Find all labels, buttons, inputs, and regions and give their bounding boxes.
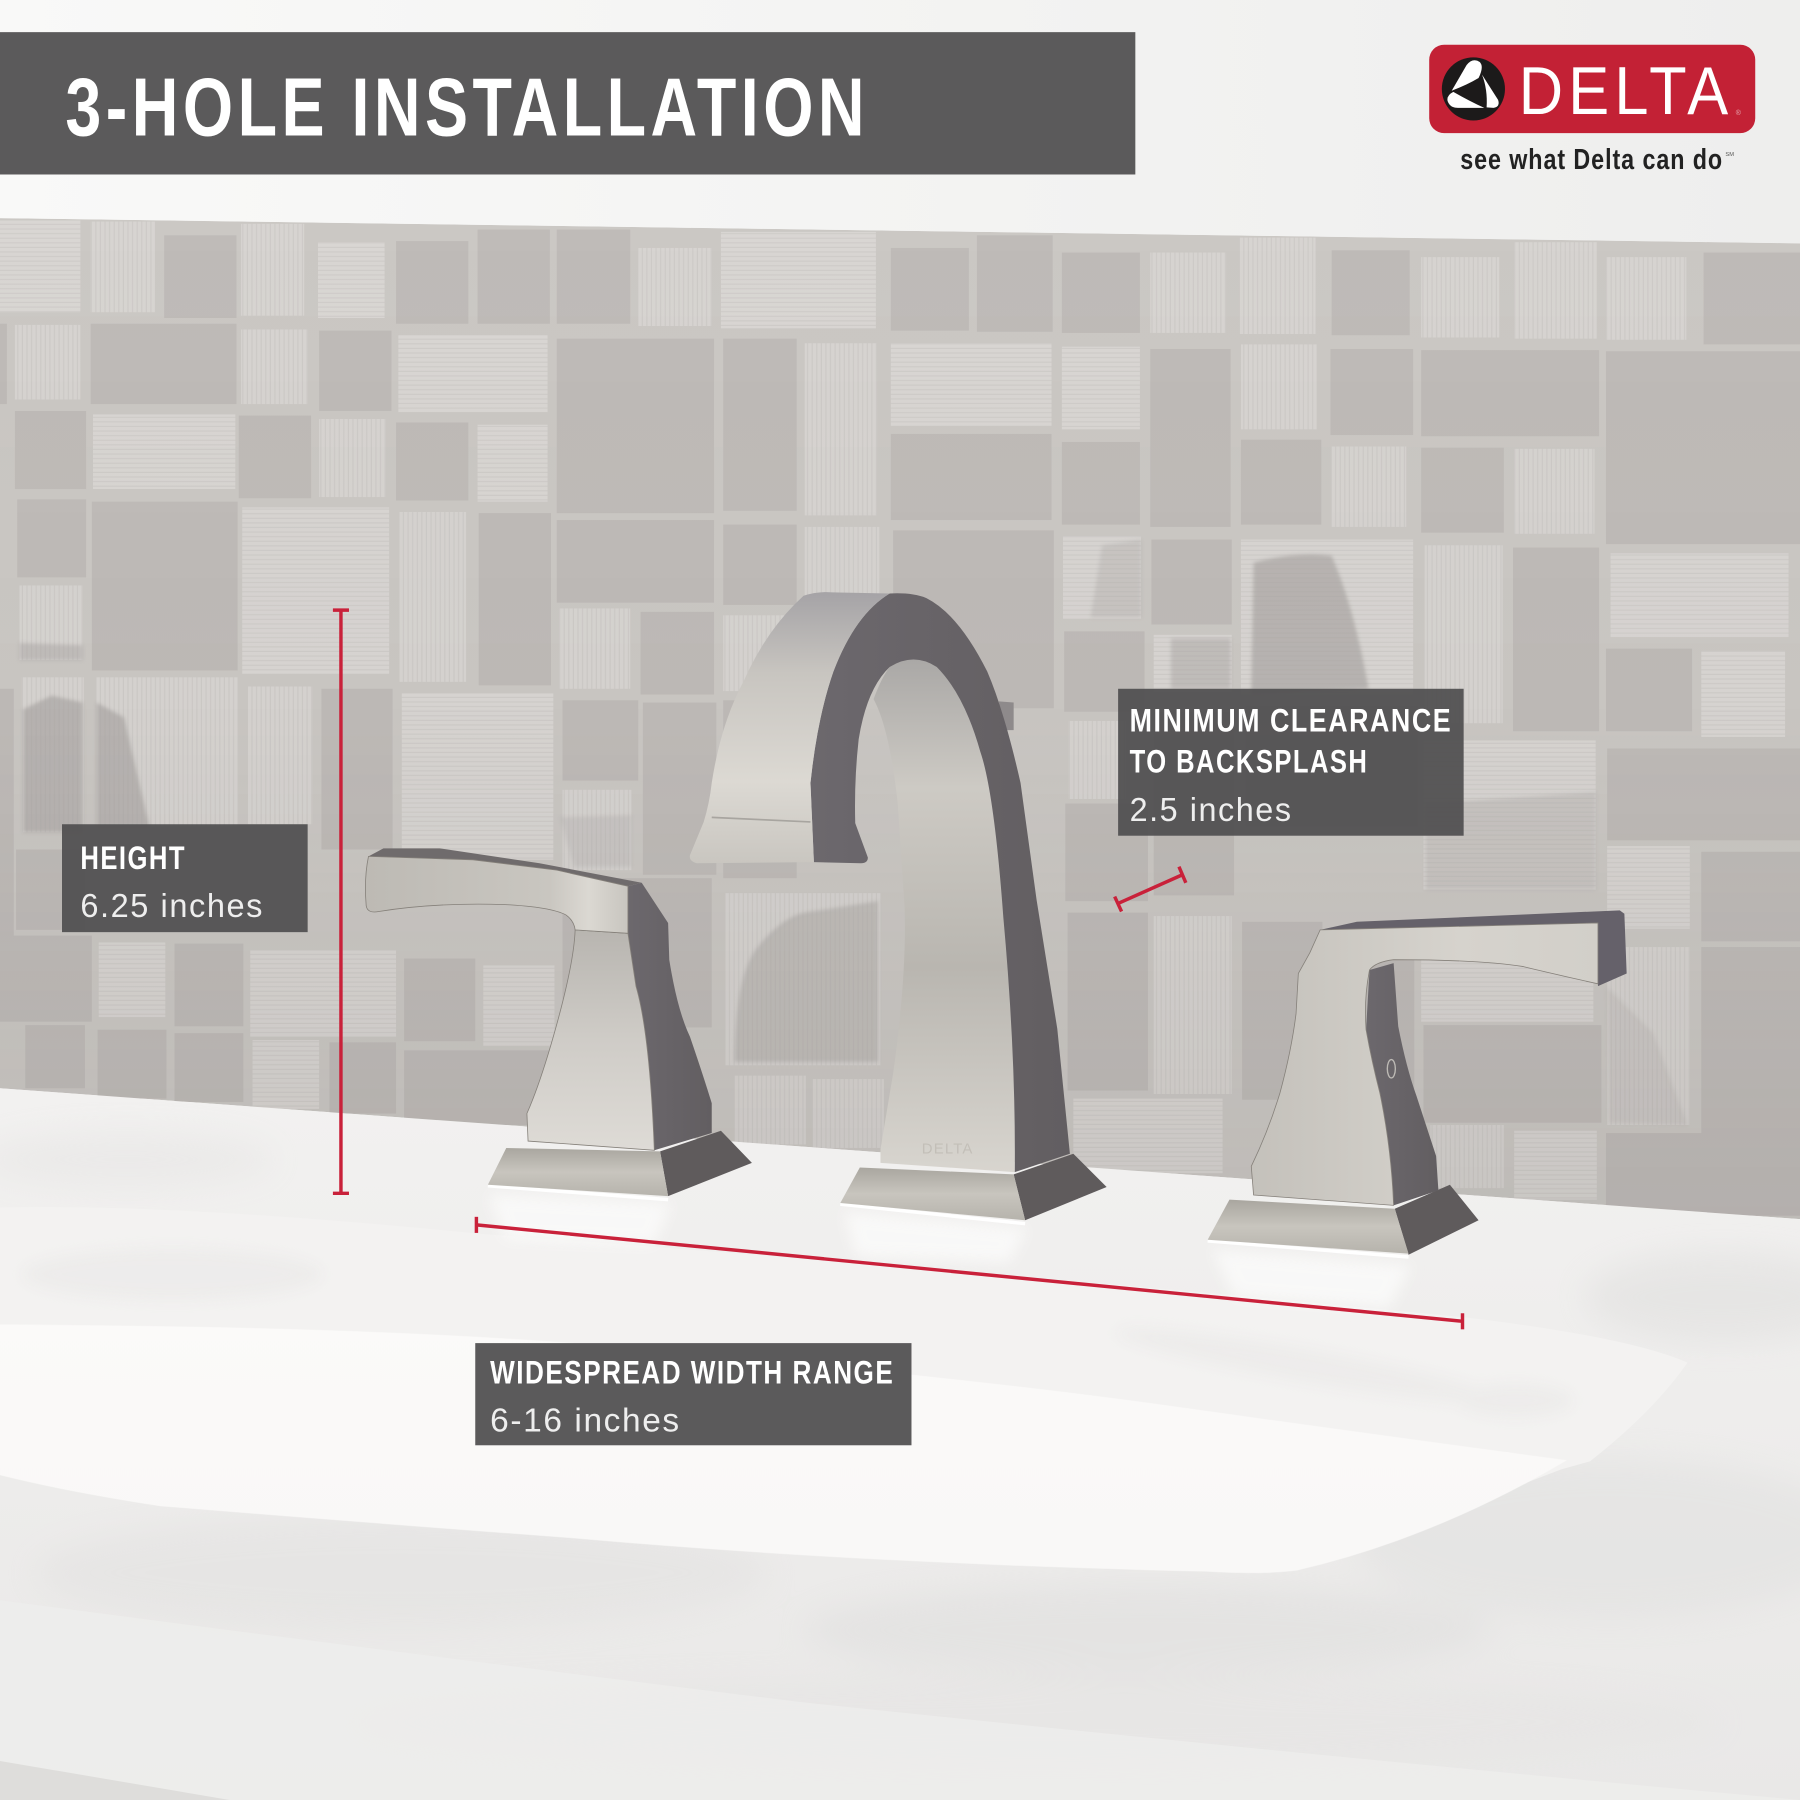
faucet: centre spout: DELTA [922, 1141, 972, 1158]
sink basin [0, 1325, 1567, 1573]
faucet reflections on counter [488, 1194, 1412, 1309]
faucet: centre spout [690, 592, 1107, 1224]
width dimension line [476, 1217, 1462, 1329]
callout: minimum clearance: MINIMUM CLEARANCE [1130, 702, 1452, 738]
faucet: right handle [1208, 910, 1627, 1257]
white shelf edge above tiles [0, 0, 1800, 243]
callout: widespread width range: WIDESPREAD WIDTH RANGE [490, 1354, 894, 1390]
callout: height: HEIGHT [80, 840, 186, 876]
callout: height [62, 824, 308, 932]
title banner: 3-HOLE INSTALLATION [65, 60, 869, 153]
countertop veining [0, 1131, 1800, 1768]
tile reflections of the faucet [20, 540, 1688, 1125]
Delta logo: SM [1725, 152, 1734, 158]
callout: minimum clearance: TO BACKSPLASH [1130, 744, 1368, 780]
sink rim [0, 1207, 1688, 1570]
title banner [0, 32, 1135, 174]
marble countertop and sink [0, 1088, 1800, 1800]
callout: widespread width range [475, 1343, 911, 1445]
tile backsplash [0, 218, 1800, 1219]
front counter edge [0, 1600, 1800, 1800]
Delta logo: DELTA [1519, 54, 1733, 129]
Delta logo: see what Delta can do [1460, 144, 1723, 176]
clearance dimension line [1115, 867, 1186, 911]
Delta logo: ® [1736, 109, 1741, 117]
callout: widespread width range: 6-16 inches [490, 1403, 681, 1440]
callout: minimum clearance: 2.5 inches [1130, 792, 1293, 829]
callout: minimum clearance [1118, 689, 1464, 836]
faucet: left handle [365, 848, 752, 1200]
height dimension line [333, 610, 349, 1194]
Delta logo [1429, 45, 1755, 176]
top background band [0, 0, 1800, 247]
callout: height: 6.25 inches [80, 888, 264, 925]
